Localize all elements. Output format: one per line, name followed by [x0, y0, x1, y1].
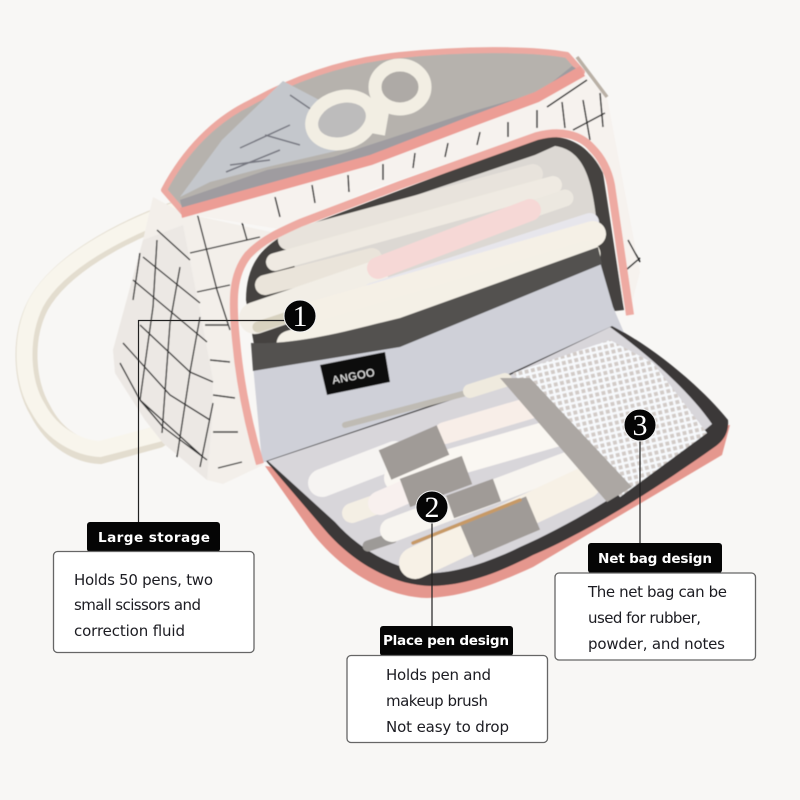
marker 3: 3: [632, 409, 648, 442]
top compartment: lining with pink rim: [164, 50, 582, 212]
text box: large storage: correction fluid: [74, 622, 185, 640]
brand tag: [320, 352, 390, 395]
scissors handles: [305, 65, 425, 151]
text box: place pen design: Not easy to drop: [386, 718, 509, 736]
text box: net bag design: [555, 573, 756, 660]
pocket back wall: [290, 146, 598, 300]
wrist strap handle: [24, 210, 176, 453]
leader line 3: [639, 440, 641, 543]
tray lining: [268, 327, 712, 573]
heading: large storage: [87, 522, 220, 552]
text box: net bag design: used for rubber,: [588, 609, 701, 627]
heading: place pen design: [380, 626, 513, 656]
callout: place pen design: [347, 626, 548, 742]
marker 3: [624, 409, 656, 442]
elastic band: [500, 378, 632, 502]
callout: net bag design: [555, 543, 756, 660]
leader line 1: [138, 320, 285, 522]
gray lining panel: [253, 262, 625, 462]
photo: pencil case: [24, 50, 730, 598]
text box: large storage: Holds 50 pens, two: [74, 571, 213, 589]
canvas front strip: [181, 57, 640, 318]
dark pocket band: [251, 247, 602, 371]
text box: large storage: [54, 552, 254, 652]
marker 1: [284, 300, 316, 333]
marble card: [180, 81, 340, 197]
text box: net bag design: The net bag can be: [587, 583, 727, 601]
marker 2: 2: [424, 491, 440, 524]
heading: net bag design: Net bag design: [598, 551, 712, 567]
text box: place pen design: makeup brush: [386, 692, 488, 710]
text box: net bag design: powder, and notes: [588, 635, 725, 653]
open tray pink edge: [265, 425, 730, 598]
top zipper: [180, 66, 585, 218]
open tray dark rim: [266, 326, 728, 586]
text box: place pen design: [347, 656, 548, 742]
leader line 2: [431, 520, 433, 626]
inner fold of lining: [180, 66, 582, 212]
pens held by elastic loops: [322, 380, 585, 563]
marker 2: [416, 491, 448, 524]
brand tag: ANGOO: [331, 367, 376, 387]
net pocket: [513, 340, 707, 497]
marker 1: 1: [292, 300, 308, 333]
heading: place pen design: Place pen design: [383, 633, 509, 649]
heading: net bag design: [588, 543, 722, 573]
pocket pink zipper edge: [234, 133, 630, 464]
front pocket interior: [246, 137, 624, 350]
callout: large storage: [54, 522, 254, 652]
text box: place pen design: Holds pen and: [386, 666, 491, 684]
heading: large storage: Large storage: [98, 530, 210, 546]
text box: large storage: small scissors and: [74, 596, 201, 614]
pens stored in pocket: [255, 174, 593, 344]
canvas side panel: [113, 197, 285, 484]
